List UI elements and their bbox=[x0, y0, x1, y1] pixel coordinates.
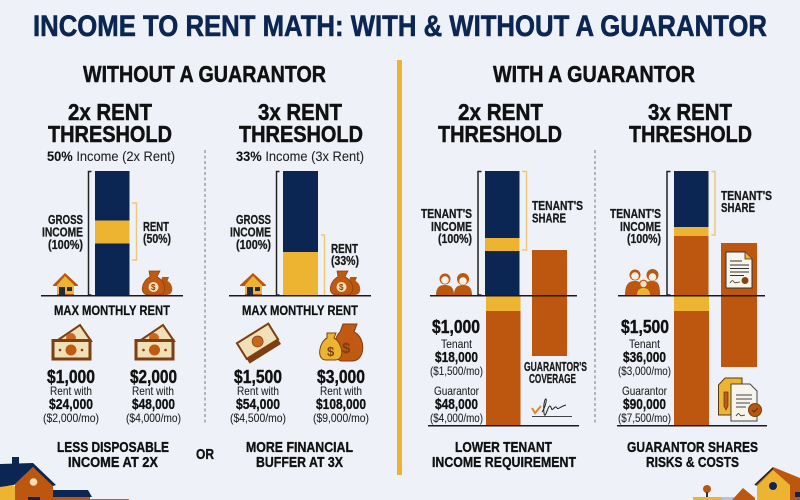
column: 2x threshold with guarantor bbox=[421, 99, 587, 471]
icon: house bbox=[240, 273, 266, 295]
figures: $1,000 tenant and guarantor: ($1,500/mo) bbox=[430, 364, 483, 378]
label: rent 33%: RENT bbox=[331, 242, 358, 256]
figures: $1,000 tenant and guarantor: $1,000 bbox=[432, 317, 480, 337]
icon: family bbox=[625, 269, 660, 295]
icon: contract document bbox=[726, 252, 752, 288]
takeaway: more financial buffer: MORE FINANCIAL bbox=[246, 439, 353, 456]
label: gross income bbox=[42, 213, 83, 252]
label: guarantor's coverage bbox=[524, 360, 587, 386]
heading: 3x rent threshold: 3x RENT bbox=[648, 99, 732, 125]
label: rent 50% bbox=[143, 220, 171, 246]
figures: $1,000 rent: $1,000 bbox=[47, 367, 95, 387]
heading: 2x rent threshold: 2x RENT bbox=[68, 99, 152, 125]
figures: $1,000 tenant and guarantor: Tenant bbox=[441, 337, 473, 351]
label: guarantor's coverage: GUARANTOR'S bbox=[524, 360, 587, 374]
figures: $1,500 rent: Rent with bbox=[237, 384, 279, 398]
takeaway: guarantor shares risks and costs: GUARANTOR SHARES bbox=[627, 439, 758, 456]
figures: $3,000 rent: $3,000 bbox=[317, 367, 365, 387]
icon: house bbox=[53, 273, 78, 295]
icon: money bags: $ bbox=[339, 283, 344, 292]
icon: two people bbox=[436, 273, 472, 295]
figures: $2,000 rent bbox=[126, 367, 181, 425]
icon: cash stack bbox=[237, 324, 281, 364]
figures: $1,500 rent: $1,500 bbox=[234, 367, 282, 387]
label: gross income: GROSS bbox=[48, 213, 83, 227]
icon: money bags: $ bbox=[151, 283, 156, 292]
heading: 3x rent threshold: THRESHOLD bbox=[629, 121, 752, 147]
takeaway: lower tenant income requirement: LOWER TENANT bbox=[455, 439, 552, 456]
figures: $1,500 tenant and guarantor: $1,500 bbox=[621, 317, 669, 337]
column: 3x threshold with guarantor bbox=[610, 99, 772, 471]
illustration: houses bottom left bbox=[0, 457, 129, 500]
figures: $3,000 rent: Rent with bbox=[320, 384, 362, 398]
guarantor coverage block bbox=[532, 250, 567, 356]
label: tenant's share bbox=[532, 199, 583, 226]
figures: $1,000 tenant and guarantor: ($4,000/mo) bbox=[430, 411, 483, 425]
lower bar: guarantor bbox=[674, 296, 709, 425]
takeaway: less disposable income: INCOME AT 2X bbox=[68, 454, 158, 471]
label: max monthly rent: MAX MONTHLY RENT bbox=[242, 302, 358, 318]
figures: $1,500 tenant and guarantor: $90,000 bbox=[623, 397, 666, 413]
figures: $3,000 rent bbox=[313, 367, 369, 425]
figures: $2,000 rent: $48,000 bbox=[132, 397, 175, 413]
takeaway: guarantor shares risks and costs bbox=[627, 439, 758, 471]
figures: $1,000 tenant and guarantor: Guarantor bbox=[434, 384, 479, 398]
tenant income bar bbox=[485, 171, 520, 295]
figures: $1,000 rent: Rent with bbox=[50, 384, 92, 398]
label: or: OR bbox=[196, 446, 214, 463]
panel: with a guarantor bbox=[421, 61, 772, 471]
label: tenant's income: (100%) bbox=[438, 232, 472, 246]
bracket: tenant share bbox=[712, 172, 715, 235]
label: tenant's income bbox=[421, 207, 472, 246]
label: rent 33%: (33%) bbox=[331, 254, 359, 268]
guarantor coverage block bbox=[721, 243, 757, 367]
label: rent 33% bbox=[331, 242, 359, 268]
column divider bbox=[594, 150, 596, 425]
panel: without a guarantor bbox=[41, 61, 371, 471]
figures: $1,000 rent: ($2,000/mo) bbox=[43, 411, 99, 425]
stacked bar: 50% rent bbox=[95, 171, 130, 295]
illustration: houses bottom right bbox=[693, 467, 800, 500]
takeaway: less disposable income: LESS DISPOSABLE bbox=[57, 439, 169, 456]
bracket: rent bbox=[132, 203, 136, 260]
baselines bbox=[428, 295, 579, 426]
figures: $3,000 rent: $108,000 bbox=[316, 397, 366, 413]
figures: $1,500 tenant and guarantor: $36,000 bbox=[623, 350, 666, 366]
figures: $2,000 rent: $2,000 bbox=[130, 367, 177, 387]
figures: $1,000 tenant and guarantor: $18,000 bbox=[435, 350, 478, 366]
icon: money bags bbox=[330, 271, 360, 295]
label: tenant's income: INCOME bbox=[620, 220, 661, 234]
column: 3x threshold without guarantor bbox=[229, 99, 371, 471]
bracket: tenant share bbox=[522, 172, 526, 250]
heading: 2x rent threshold bbox=[438, 99, 562, 147]
label: rent 50%: (50%) bbox=[143, 232, 171, 246]
column divider bbox=[204, 150, 206, 425]
figures: $1,500 tenant and guarantor: Guarantor bbox=[622, 384, 667, 398]
label: gross income: (100%) bbox=[48, 238, 83, 252]
icon: cash bags: $ bbox=[342, 340, 351, 357]
figures: $1,500 tenant and guarantor: ($7,500/mo) bbox=[618, 411, 671, 425]
figures: $3,000 rent: ($9,000/mo) bbox=[313, 411, 369, 425]
figures: $1,500 rent: $54,000 bbox=[236, 397, 280, 413]
label: tenant's share bbox=[721, 189, 772, 215]
heading: with a guarantor: WITH A GUARANTOR bbox=[493, 61, 695, 87]
heading: 2x rent threshold: THRESHOLD bbox=[48, 121, 172, 147]
heading: 3x rent threshold: 3x RENT bbox=[258, 99, 342, 125]
takeaway: more financial buffer: BUFFER AT 3X bbox=[256, 454, 343, 471]
bracket: tenant income bbox=[478, 172, 482, 295]
label: tenant's share: SHARE bbox=[721, 201, 755, 215]
icon: cash bags bbox=[320, 324, 363, 361]
label: tenant's income: INCOME bbox=[431, 220, 472, 234]
heading: without a guarantor: WITHOUT A GUARANTOR bbox=[83, 61, 326, 87]
label: rent 50%: RENT bbox=[143, 220, 169, 234]
label: tenant's share: TENANT'S bbox=[721, 189, 772, 203]
label: tenant's income bbox=[610, 207, 661, 246]
icon: money bags bbox=[142, 271, 172, 295]
baseline bbox=[229, 295, 371, 296]
label: tenant's share: SHARE bbox=[532, 212, 566, 226]
figures: $2,000 rent: Rent with bbox=[132, 384, 174, 398]
label: max monthly rent: MAX MONTHLY RENT bbox=[54, 302, 170, 318]
takeaway: less disposable income bbox=[57, 439, 169, 471]
takeaway: more financial buffer bbox=[246, 439, 353, 471]
bracket: tenant income bbox=[667, 172, 670, 295]
label: guarantor's coverage: COVERAGE bbox=[529, 372, 576, 386]
heading: 3x rent threshold bbox=[239, 99, 363, 147]
figures: $1,500 tenant and guarantor bbox=[618, 317, 671, 425]
label: tenant's income: (100%) bbox=[627, 232, 661, 246]
subtitle: 50% income: 50% Income (2x Rent) bbox=[47, 148, 175, 164]
figures: $1,500 tenant and guarantor: Tenant bbox=[629, 337, 661, 351]
heading: 3x rent threshold: THRESHOLD bbox=[239, 121, 363, 147]
takeaway: lower tenant income requirement bbox=[432, 439, 576, 471]
figures: $1,000 tenant and guarantor bbox=[430, 317, 483, 425]
icon: cash right bbox=[136, 325, 174, 359]
icon: folder with signed document bbox=[718, 378, 762, 421]
figures: $1,500 rent: ($4,500/mo) bbox=[230, 411, 286, 425]
icon: cash left bbox=[53, 325, 91, 359]
heading: 2x rent threshold: 2x RENT bbox=[458, 99, 543, 125]
label: gross income: INCOME bbox=[230, 226, 271, 240]
label: gross income bbox=[230, 213, 271, 252]
baseline bbox=[41, 295, 183, 296]
label: gross income: INCOME bbox=[42, 226, 83, 240]
icon: cash bags: $ bbox=[327, 344, 335, 359]
figures: $1,000 rent: $24,000 bbox=[49, 397, 93, 413]
takeaway: lower tenant income requirement: INCOME REQUIREMENT bbox=[432, 454, 576, 471]
heading: 2x rent threshold bbox=[48, 99, 172, 147]
lower bar: guarantor bbox=[486, 296, 520, 425]
figures: $1,000 tenant and guarantor: $48,000 bbox=[435, 397, 478, 413]
heading: 3x rent threshold bbox=[629, 99, 752, 147]
label: tenant's income: TENANT'S bbox=[610, 207, 661, 221]
figures: $1,000 rent bbox=[43, 367, 99, 425]
label: tenant's income: TENANT'S bbox=[421, 207, 472, 221]
bracket: rent bbox=[321, 235, 324, 295]
takeaway: guarantor shares risks and costs: RISKS & COSTS bbox=[646, 454, 739, 471]
subtitle: 33% income: 33% Income (3x Rent) bbox=[236, 148, 364, 164]
label: gross income: (100%) bbox=[236, 238, 271, 252]
heading: 2x rent threshold: THRESHOLD bbox=[438, 121, 562, 147]
label: tenant's share: TENANT'S bbox=[532, 199, 583, 213]
bracket: gross income bbox=[276, 172, 280, 295]
figures: $2,000 rent: ($4,000/mo) bbox=[126, 411, 181, 425]
baselines bbox=[617, 295, 767, 426]
central divider bbox=[397, 60, 402, 475]
column: 2x threshold without guarantor bbox=[41, 99, 183, 471]
label: gross income: GROSS bbox=[236, 213, 271, 227]
icon: signature bbox=[532, 399, 572, 417]
tenant income bar bbox=[674, 171, 708, 295]
figures: $1,500 tenant and guarantor: ($3,000/mo) bbox=[618, 364, 671, 378]
stacked bar: 33% rent bbox=[283, 171, 318, 295]
figures: $1,500 rent bbox=[230, 367, 286, 425]
bracket: gross income bbox=[88, 172, 92, 295]
